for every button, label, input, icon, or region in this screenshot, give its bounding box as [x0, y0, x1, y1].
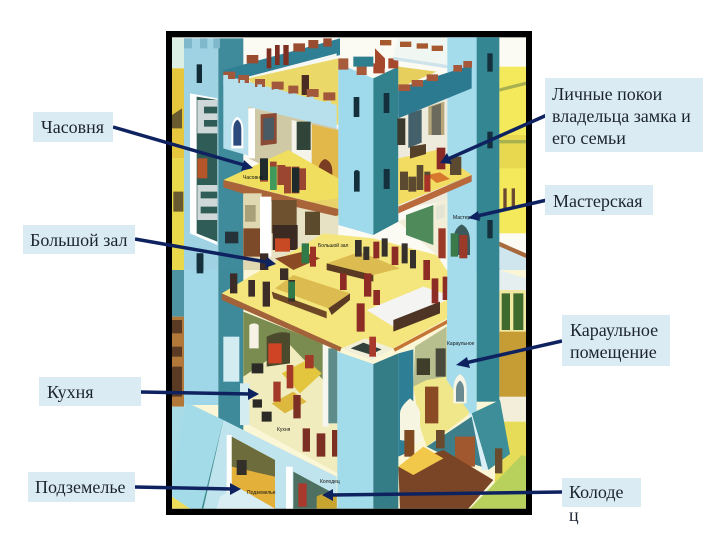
kitchen [243, 313, 338, 473]
central tower [338, 63, 373, 235]
arrow: chapel [113, 127, 253, 171]
right tower lower [447, 268, 477, 415]
great hall floor [222, 233, 472, 348]
stair shaft [190, 93, 217, 245]
label: Guard room: Караульное [570, 320, 658, 340]
label: Well: Колоде [569, 482, 623, 502]
central tower lower [337, 352, 373, 509]
private chambers room [398, 98, 447, 208]
label: Great hall: Большой зал [30, 230, 128, 250]
small caption: Dungeon: Подземелье [247, 490, 276, 496]
small caption: Kitchen: Кухня [277, 427, 291, 433]
stone base [217, 487, 275, 509]
chapel room [248, 107, 338, 202]
upper roof terrace [248, 58, 338, 125]
label: Dungeon [28, 472, 135, 502]
label: Workshop [545, 185, 653, 215]
label: Chapel: Часовня [41, 117, 104, 137]
people in the hall [230, 253, 295, 307]
great hall upper wall [243, 195, 338, 278]
arrow: guard room [456, 341, 562, 368]
white table [367, 287, 453, 327]
left tower lower [184, 270, 218, 405]
wooden bridge [398, 450, 493, 509]
right tower [447, 37, 477, 275]
frame [166, 31, 532, 515]
small caption: Chapel: Часовня [243, 175, 263, 181]
label: Great hall [23, 225, 135, 254]
label: Chapel [33, 112, 113, 142]
arrow: great hall [135, 239, 276, 268]
label: Well [562, 478, 641, 507]
small caption: Great hall: Большой зал [318, 242, 349, 249]
right rear: roof, rear parapet [398, 67, 437, 88]
label: Workshop: Мастерская [553, 191, 643, 211]
arrow: well [322, 489, 562, 501]
guard room [413, 327, 447, 387]
label: Guard room [562, 315, 670, 366]
dungeon and well walls [203, 420, 337, 509]
label: Private chambers [545, 78, 703, 152]
label: Guard room: помещение [570, 342, 657, 362]
arrow: kitchen [141, 388, 259, 400]
lower part of the castle [172, 233, 526, 509]
hearth rug [275, 252, 320, 270]
upper part of the castle [172, 37, 526, 278]
label: Private chambers: его семьи [552, 128, 626, 148]
wall: upper front parapet [223, 75, 337, 156]
long table near the front [275, 275, 350, 308]
small caption: Guard room: Караульное [447, 341, 475, 347]
private chamber floor [398, 150, 472, 205]
entrance arch [400, 398, 420, 443]
rear parapet [223, 38, 340, 88]
label: Kitchen [39, 377, 141, 406]
arrow: private chambers [440, 115, 547, 164]
label: Kitchen: Кухня [47, 382, 94, 402]
upper table [327, 252, 400, 275]
label: Dungeon: Подземелье [35, 477, 126, 497]
workshop wall [398, 198, 447, 260]
right front parapet [398, 65, 472, 118]
text: ц [569, 505, 579, 525]
small caption: Well: Колодец [320, 479, 340, 485]
left tower [184, 38, 218, 275]
label: Private chambers: владельца замка и [552, 106, 691, 126]
label: Private chambers: Личные покои [552, 84, 662, 104]
arrow: dungeon [135, 483, 241, 495]
merlons [184, 38, 220, 48]
chapel floor [223, 150, 338, 215]
arrow: workshop [468, 200, 547, 221]
small caption: Workshop: Мастерская [453, 215, 481, 221]
